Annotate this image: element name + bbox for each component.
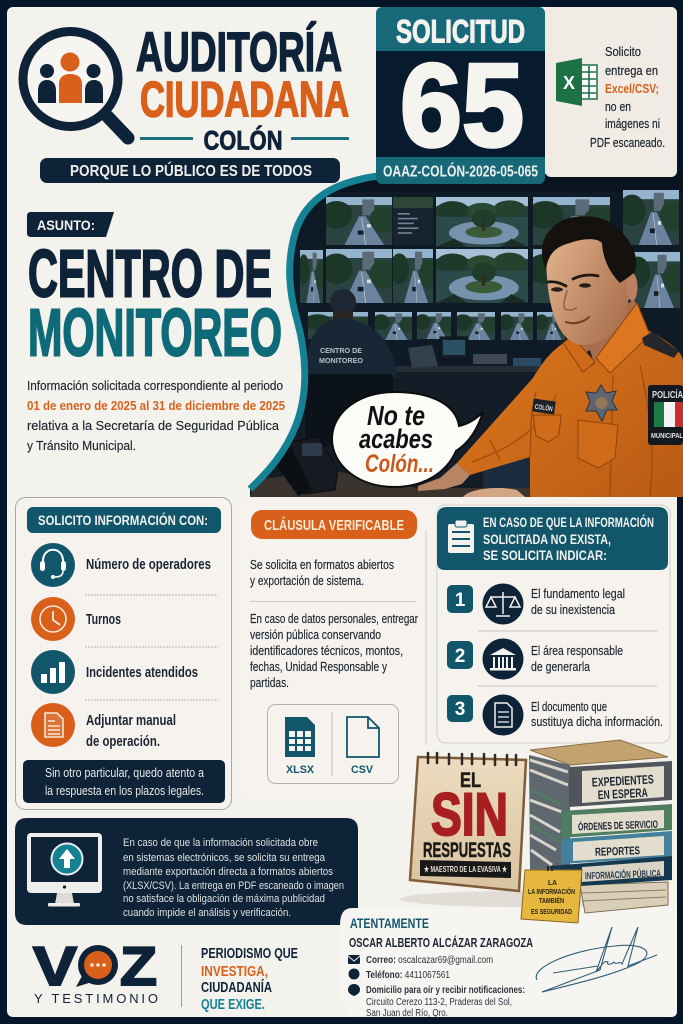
- slogan: QUE EXIGE.: [201, 997, 265, 1013]
- clause text one: y exportación de sistema.: [250, 574, 364, 588]
- sheriff star badge: [586, 385, 617, 421]
- address: Domicilio para oír y recibir notificaciones:: [366, 985, 525, 996]
- request description text: y Tránsito Municipal.: [27, 438, 136, 453]
- item 1: legal basis: El fundamento legal: [531, 587, 625, 601]
- yellow sticky note: ES SEGURIDAD: [531, 907, 572, 916]
- request number panel: [376, 7, 545, 184]
- desk phone: [274, 437, 338, 496]
- address: Circuito Cerezo 113-2, Praderas del Sol,: [366, 997, 512, 1008]
- side pages: [529, 755, 570, 905]
- excel note text: [590, 45, 665, 150]
- heading: solicitud: SOLICITUD: [396, 14, 525, 50]
- item 1: legal basis: [447, 584, 625, 624]
- icon: csv: CSV: [351, 764, 374, 776]
- icon: headset: [31, 543, 75, 587]
- collar: [563, 336, 595, 372]
- item 3: substitute document: El documento que: [531, 700, 607, 714]
- clause text two: [250, 612, 418, 690]
- notebook text: EL: [460, 769, 481, 792]
- item 1: legal basis: de su inexistencia: [531, 603, 615, 617]
- clause text two: versión pública conservando: [250, 628, 381, 642]
- panel: electronic export note: [15, 818, 358, 925]
- item: incidentes atendidos: Incidentes atendidos: [86, 664, 198, 681]
- speech bubble: [332, 392, 483, 487]
- logo: voz y testimonio: Z: [120, 935, 157, 997]
- heading: centro de monitoreo: [28, 236, 282, 370]
- title: Auditoría: AUDITORÍA: [136, 20, 342, 83]
- screen wall: [298, 190, 683, 340]
- teal curve border: [250, 176, 378, 489]
- closing note: la respuesta en los plazos legales.: [45, 784, 204, 798]
- clause text two: partidas.: [250, 676, 289, 690]
- icon: document: [31, 703, 75, 747]
- export note text: En caso de que la información solicitada obre: [123, 837, 318, 849]
- item: adjuntar manual: Adjuntar manual: [86, 712, 176, 729]
- ear: [626, 273, 638, 301]
- icon: bar chart: [31, 650, 75, 694]
- desk equipment: [408, 337, 541, 368]
- eyebrows, eyes, nose, mouth: [548, 275, 598, 323]
- monitoring centre illustration: [250, 172, 683, 497]
- panel header: SOLICITO INFORMACIÓN CON:: [38, 511, 208, 528]
- illustration background: [250, 172, 683, 497]
- panel header: [437, 507, 668, 570]
- binder: expedientes en espera: EXPEDIENTES: [591, 772, 654, 790]
- tagline pill: [40, 158, 340, 183]
- slogan: PERIODISMO QUE: [201, 946, 298, 962]
- notebook: el sin respuestas: SIN: [431, 781, 508, 848]
- item: número de operadores: Número de operadores: [86, 556, 211, 573]
- request description text: relativa a la Secretaría de Seguridad Pública: [27, 418, 280, 433]
- heading: centro de monitoreo: MONITOREO: [28, 296, 282, 370]
- item 3: substitute document: 3: [455, 699, 465, 720]
- logo: voz y testimonio: V: [33, 935, 77, 997]
- yellow sticky note: LA: [548, 878, 558, 887]
- logo: Auditoría Ciudadana: [23, 20, 349, 156]
- export note text: [123, 837, 344, 919]
- binder: expedientes en espera: EN ESPERA: [597, 786, 648, 802]
- icon: phone: [348, 968, 360, 980]
- address: [366, 985, 525, 1019]
- binder: reportes: [561, 831, 672, 864]
- notebook: el sin respuestas: [410, 753, 526, 891]
- pockets: [533, 415, 618, 468]
- clause text one: Se solicita en formatos abiertos: [250, 558, 394, 572]
- excel note text: imágenes ni: [605, 117, 660, 131]
- export note text: en sistemas electrónicos, se solicita su entrega: [123, 852, 326, 864]
- heading: centro de monitoreo: CENTRO DE: [28, 236, 272, 312]
- excel note text: no en: [605, 100, 631, 114]
- folio: OAAZ-COLÓN-2026-05-065: [383, 162, 538, 180]
- asunto tag: ASUNTO:: [37, 217, 95, 233]
- tagline pill: PORQUE LO PÚBLICO ES DE TODOS: [70, 162, 312, 180]
- slogan: CIUDADANÍA: [201, 979, 272, 996]
- yellow sticky note: TAMBIÉN: [539, 896, 564, 905]
- hands: [418, 463, 470, 491]
- heading: atentamente: ATENTAMENTE: [350, 916, 429, 931]
- slogan: INVESTIGA,: [201, 964, 268, 980]
- signature block: [340, 908, 677, 1019]
- panel: cláusula verificable: [240, 498, 430, 798]
- panel header: SOLICITADA NO EXISTA,: [483, 532, 611, 547]
- item 2: responsible area: [447, 638, 623, 680]
- operator jacket label: [319, 348, 363, 363]
- icon: mail: [348, 955, 360, 964]
- yellow sticky note: [521, 866, 582, 923]
- binder: reportes: REPORTES: [595, 845, 640, 859]
- request description text: [27, 378, 285, 453]
- icon: clock: [31, 597, 75, 641]
- epaulet: [642, 332, 679, 358]
- export note text: (XLSX/CSV). La entrega en PDF escaneado o imagen: [123, 880, 344, 892]
- name: OSCAR ALBERTO ALCÁZAR ZARAGOZA: [349, 935, 533, 950]
- closing note: [23, 760, 225, 803]
- face: [546, 235, 632, 345]
- icon: monitor upload: [27, 833, 102, 906]
- panel header: [27, 507, 221, 533]
- excel note text: Excel/CSV;: [605, 82, 659, 96]
- binder: información pública: [550, 856, 672, 888]
- item: adjuntar manual: [86, 712, 176, 750]
- panel: solicito información: [16, 498, 232, 810]
- binder: órdenes de servicio: [561, 804, 672, 838]
- clause heading: [251, 510, 417, 539]
- neck: [580, 300, 636, 368]
- operator jacket label: MONITOREO: [319, 356, 363, 365]
- item: turnos: Turnos: [86, 611, 121, 628]
- notebook: el sin respuestas: ★ MAESTRO DE LA EVASIVA ★: [424, 864, 508, 874]
- address: San Juan del Río, Qro.: [366, 1008, 448, 1019]
- shirt: [457, 330, 683, 497]
- clause text two: fechas, Unidad Responsable y: [250, 660, 388, 674]
- excel note text: entrega en: [605, 64, 658, 78]
- logo: voz y testimonio: [33, 935, 158, 1006]
- speech bubble: No te: [367, 400, 425, 431]
- item 3: substitute document: sustituya dicha información.: [531, 715, 663, 729]
- yellow sticky note: LA INFORMACIÓN: [528, 887, 575, 896]
- file formats box: [268, 704, 398, 784]
- excel note text: PDF escaneado.: [590, 136, 665, 150]
- notebook rings: [428, 753, 516, 765]
- name tag: Colón: COLÓN: [534, 402, 553, 413]
- icon: location pin: [348, 984, 360, 996]
- shadow: [400, 891, 640, 907]
- icon: excel: X: [563, 73, 575, 93]
- request description text: 01 de enero de 2025 al 31 de diciembre de 2025: [27, 398, 285, 413]
- title: Ciudadana: CIUDADANA: [140, 72, 349, 128]
- item 3: substitute document: [447, 694, 663, 736]
- asunto tag: [27, 212, 114, 237]
- item 2: responsible area: de generarla: [531, 660, 590, 674]
- icon: clipboard: [448, 520, 474, 553]
- export note text: cuando impide el análisis y verificación.: [123, 907, 291, 919]
- logo: voz y testimonio: Y TESTIMONIO: [34, 991, 158, 1006]
- name tag: Colón: [532, 399, 556, 414]
- clause text one: [250, 558, 394, 588]
- operator jacket label: CENTRO DE: [320, 346, 362, 355]
- item 1: legal basis: 1: [455, 590, 466, 611]
- speech bubble: acabes: [359, 424, 433, 454]
- excel note text: Solicito: [605, 45, 641, 59]
- binder: expedientes en espera: [569, 761, 672, 807]
- request description text: Información solicitada correspondiente al periodo: [27, 378, 283, 393]
- speech bubble: Colón...: [365, 450, 434, 478]
- item 2: responsible area: 2: [455, 646, 465, 667]
- number 65: 65: [400, 40, 524, 172]
- item: adjuntar manual: de operación.: [86, 733, 160, 750]
- signature block: Correo: oscalcazar69@gmail.com: [366, 955, 493, 966]
- desk: [250, 368, 560, 497]
- panel: si la información no existe: [437, 505, 670, 743]
- clause text two: identificadores técnicos, montos,: [250, 644, 403, 658]
- item 2: responsible area: El área responsable: [531, 644, 623, 658]
- stack of folders: [400, 740, 672, 913]
- excel note panel: [545, 7, 677, 177]
- police patch: [648, 385, 683, 445]
- closing note: Sin otro particular, quedo atento a: [45, 766, 204, 780]
- icon: xlsx: XLSX: [286, 764, 315, 776]
- export note text: mediante exportación directa a formatos abiertos: [123, 866, 333, 878]
- top folder: [530, 740, 668, 765]
- police officer: [418, 216, 683, 497]
- export note text: no satisface la obligación de máxima publicidad: [123, 893, 325, 905]
- hair: [542, 216, 636, 283]
- signature block: Teléfono: 4411067561: [366, 970, 450, 981]
- clause text two: En caso de datos personales, entregar: [250, 612, 418, 626]
- slogan: [201, 946, 298, 1013]
- bottom pages: [580, 882, 668, 913]
- icon: speech bubble O: [76, 945, 118, 987]
- panel header: SE SOLICITA INDICAR:: [483, 548, 607, 563]
- icon: magnifier with citizens: [23, 32, 128, 138]
- operator from behind: [305, 289, 398, 446]
- signature: [536, 927, 657, 992]
- clause heading: CLÁUSULA VERIFICABLE: [264, 517, 404, 534]
- title: Colón: COLÓN: [204, 124, 282, 156]
- icon: excel: [556, 58, 597, 106]
- notebook: el sin respuestas: RESPUESTAS: [423, 839, 511, 862]
